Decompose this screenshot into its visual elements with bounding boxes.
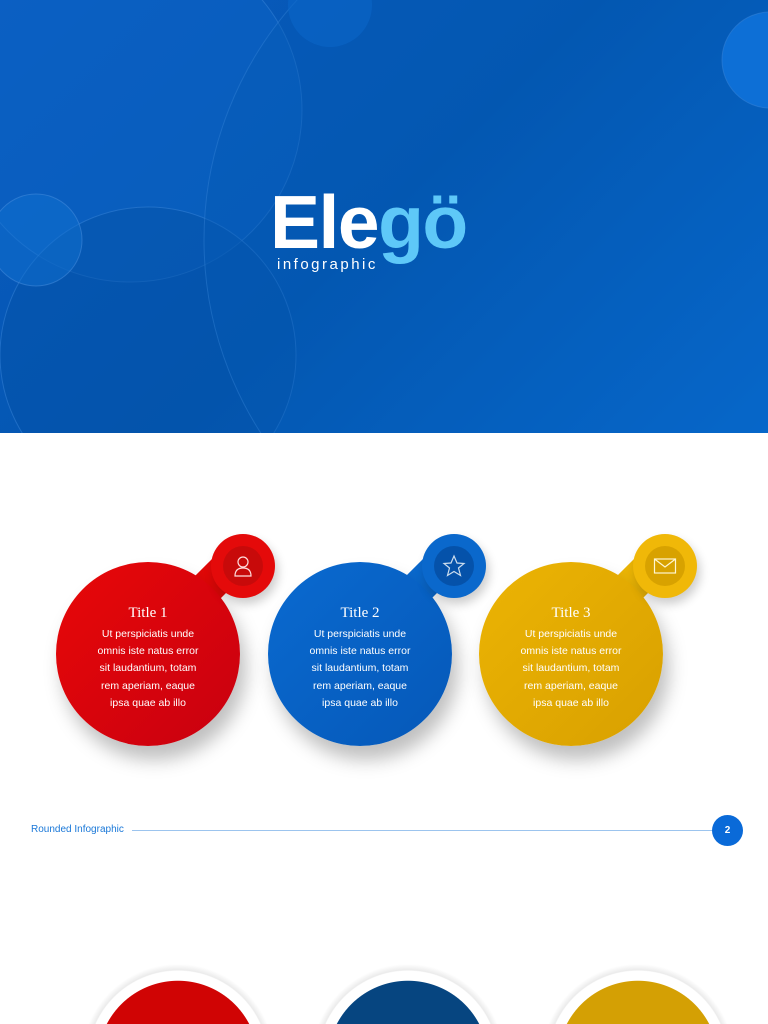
card 3: sit laudantium, totam xyxy=(523,662,619,674)
icon: envelope xyxy=(633,534,697,598)
card 3: ipsa quae ab illo xyxy=(533,697,609,709)
card 2: Ut perspiciatis unde xyxy=(314,628,406,640)
card 2: sit laudantium, totam xyxy=(312,662,408,674)
card 3: Ut perspiciatis unde xyxy=(525,628,617,640)
card 1: omnis iste natus error xyxy=(98,645,198,657)
card 1: ipsa quae ab illo xyxy=(110,697,186,709)
card 3: rem aperiam, eaque xyxy=(524,680,618,692)
card 1: Ut perspiciatis unde xyxy=(102,628,194,640)
header banner xyxy=(0,0,768,433)
card 2: ipsa quae ab illo xyxy=(322,697,398,709)
footer: label, line, page number: Rounded Infographic xyxy=(31,824,124,835)
card 1: sit laudantium, totam xyxy=(100,662,196,674)
icon: star xyxy=(422,534,486,598)
card 2: rem aperiam, eaque xyxy=(313,680,407,692)
card 2: omnis iste natus error xyxy=(310,645,410,657)
card 2 xyxy=(264,534,493,770)
logo: infographic xyxy=(277,256,378,273)
footer: label, line, page number: 2 xyxy=(725,825,730,836)
logo: Elegö xyxy=(270,180,467,264)
card 1 xyxy=(52,534,282,770)
card 1: Title 1 xyxy=(128,605,168,621)
card 3 xyxy=(476,534,704,770)
icon: person xyxy=(211,534,275,598)
card 3: Title 3 xyxy=(551,605,591,621)
footer: label, line, page number xyxy=(31,815,743,846)
card 3: omnis iste natus error xyxy=(521,645,621,657)
card 1: rem aperiam, eaque xyxy=(101,680,195,692)
bottom circles xyxy=(91,966,725,1024)
card 2: Title 2 xyxy=(340,605,380,621)
